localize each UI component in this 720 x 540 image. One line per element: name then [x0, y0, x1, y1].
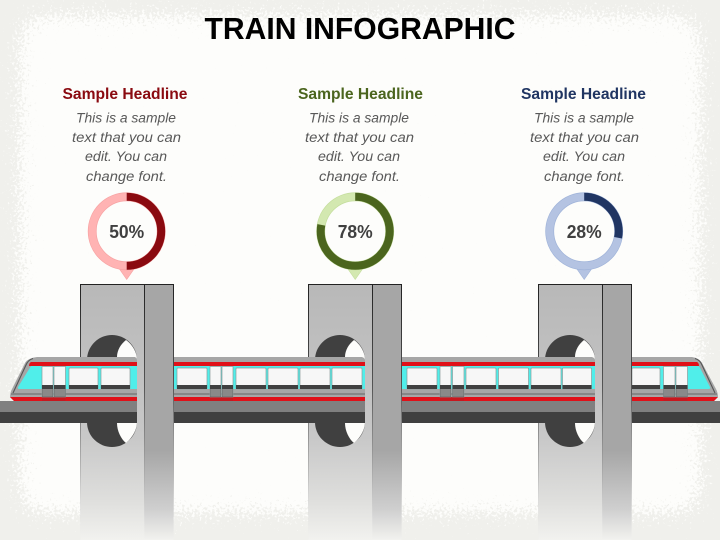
pillar 1 side face [144, 284, 174, 540]
train car: middle section 2 [402, 357, 595, 423]
text block: column 1 [62, 86, 188, 184]
donut marker: 50% [92, 197, 161, 280]
body text: column 1 [72, 110, 181, 184]
pillar 2 side face [372, 284, 402, 540]
body text: column 2: This is a sample [309, 110, 409, 126]
pillar 1 front with arch opening [80, 284, 144, 540]
pillar 2 front with arch opening [308, 284, 372, 540]
body text: column 3: This is a sample [534, 110, 634, 126]
text block: column 3 [521, 86, 646, 184]
donut marker: 78%: 78% [338, 222, 373, 242]
body text: column 3: change font. [544, 169, 625, 184]
headline: column 2: Sample Headline [298, 86, 423, 103]
body text: column 3: edit. You can [543, 149, 625, 164]
headline: column 1: Sample Headline [62, 86, 188, 103]
body text: column 2 [305, 110, 414, 184]
donut marker: 28% [550, 197, 619, 280]
body text: column 3: text that you can [530, 130, 639, 145]
donut marker: 50%: 50% [109, 222, 144, 242]
train car: left cab [0, 357, 137, 423]
text block: column 2 [298, 86, 423, 184]
body text: column 1: change font. [86, 169, 167, 184]
body text: column 2: change font. [319, 169, 400, 184]
body text: column 2: text that you can [305, 130, 414, 145]
train car: middle section 1 [174, 357, 365, 423]
donut marker: 28%: 28% [567, 222, 602, 242]
title: TRAIN INFOGRAPHIC [204, 11, 516, 46]
body text: column 1: text that you can [72, 130, 181, 145]
pillar 3 side face [602, 284, 632, 540]
body text: column 1: This is a sample [76, 110, 176, 126]
body text: column 2: edit. You can [318, 149, 400, 164]
body text: column 3 [530, 110, 639, 184]
train car: right cab [632, 357, 720, 423]
donut marker: 78% [321, 197, 390, 280]
headline: column 3: Sample Headline [521, 86, 646, 103]
body text: column 1: edit. You can [85, 149, 167, 164]
pillar 3 front with arch opening [538, 284, 602, 540]
